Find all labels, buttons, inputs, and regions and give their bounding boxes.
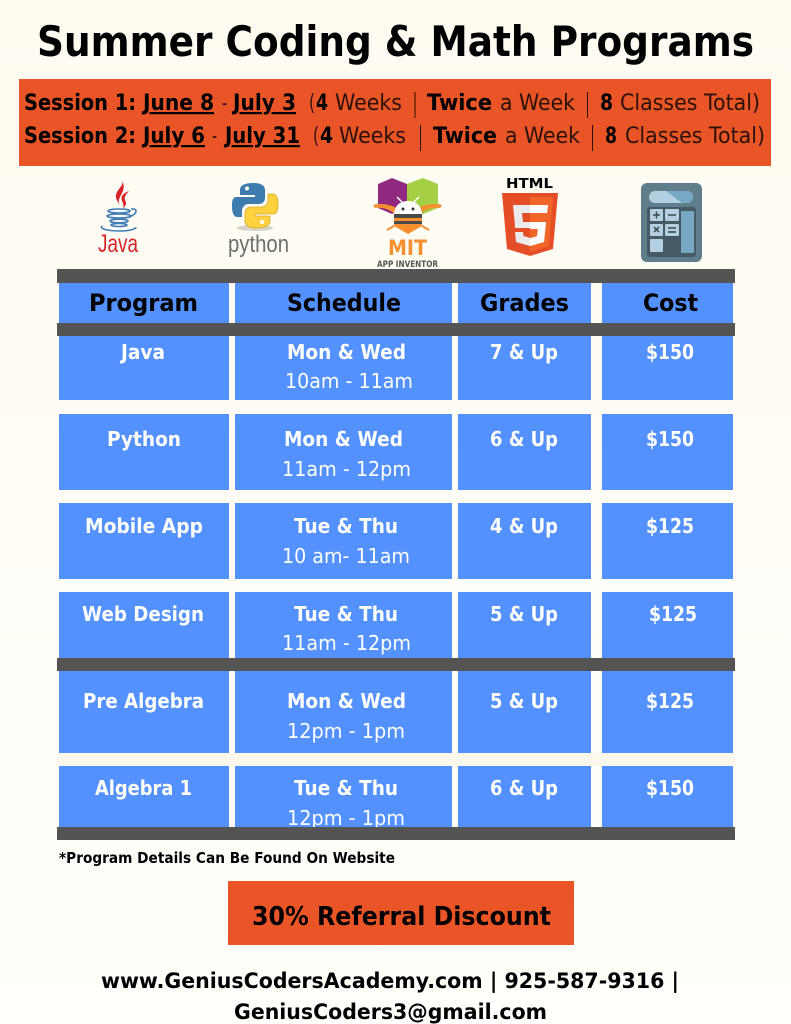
row: python: Python xyxy=(107,427,181,451)
row: algebra 1: $150 xyxy=(646,776,694,800)
icon: html5 xyxy=(502,177,558,256)
band behind final rows xyxy=(57,753,735,766)
row: mobile app: Mobile App xyxy=(85,514,203,538)
row: pre algebra: $125 xyxy=(646,689,694,713)
table header row: Schedule xyxy=(287,289,401,317)
row: pre algebra: Pre Algebra xyxy=(83,689,204,713)
icon: mit app inventor xyxy=(373,178,442,270)
callout: referral discount: 30% Referral Discount xyxy=(252,902,551,932)
session 2 line: Weeks xyxy=(339,124,406,149)
icon: calculator xyxy=(641,183,702,262)
icon: python: python xyxy=(228,231,289,258)
session 2 line: Session 2: xyxy=(24,124,136,149)
contact details xyxy=(101,969,679,1024)
session 2 line: a Week xyxy=(505,124,580,149)
row: pre algebra: Mon & Wed xyxy=(287,689,406,713)
panel: session dates xyxy=(19,79,771,166)
session 2 line: July 31 xyxy=(223,124,300,149)
session 1 line: July 3 xyxy=(231,91,296,116)
icon: java xyxy=(98,180,138,258)
callout: referral discount xyxy=(228,881,574,945)
row: java: Mon & Wed xyxy=(287,340,406,364)
session 1 line: 8 xyxy=(600,91,613,116)
row: web design xyxy=(59,592,733,658)
session 1 line: Classes Total) xyxy=(620,91,760,116)
icon: mit app inventor: APP INVENTOR xyxy=(377,260,438,270)
row: mobile app xyxy=(59,503,733,579)
row: python: 11am - 12pm xyxy=(282,457,411,481)
session 1 line: a Week xyxy=(500,91,575,116)
row: web design: $125 xyxy=(649,602,697,626)
row: mobile app: $125 xyxy=(646,514,694,538)
row: java: Java xyxy=(119,340,165,364)
icon: mit app inventor: MIT xyxy=(388,236,428,260)
row: mobile app: 4 & Up xyxy=(490,514,558,538)
table xyxy=(57,269,735,840)
session 2 line: Classes Total) xyxy=(625,124,765,149)
row: algebra 1 xyxy=(59,766,733,830)
session 1 line: - xyxy=(222,91,227,116)
session 1 line: 4 xyxy=(316,91,328,116)
contact details: GeniusCoders3@gmail.com xyxy=(234,1000,547,1024)
row: java xyxy=(59,336,733,400)
session 2 line xyxy=(24,124,765,151)
icon: java: Java xyxy=(98,230,138,258)
row: java: 10am - 11am xyxy=(285,369,413,393)
session 2 line: Twice xyxy=(433,124,497,149)
table bars xyxy=(57,269,735,840)
table header row: Cost xyxy=(643,289,698,317)
table header row: Grades xyxy=(480,289,569,317)
session 1 line: Session 1: xyxy=(24,91,136,116)
row: mobile app: 10 am- 11am xyxy=(282,544,410,568)
table header row: Program xyxy=(89,289,198,317)
row: python xyxy=(59,414,733,490)
session 2 line: July 6 xyxy=(141,124,205,149)
row: algebra 1: Algebra 1 xyxy=(95,776,192,800)
row: algebra 1: 6 & Up xyxy=(490,776,558,800)
footnote: *Program Details Can Be Found On Website xyxy=(59,849,395,867)
row: python: Mon & Wed xyxy=(284,427,403,451)
session 1 line xyxy=(24,91,760,118)
session 2 line: 8 xyxy=(605,124,617,149)
session 1 line: Weeks xyxy=(335,91,402,116)
row: java: 7 & Up xyxy=(490,340,558,364)
row: python: $150 xyxy=(646,427,694,451)
session 2 line: - xyxy=(212,124,217,149)
row: algebra 1: Tue & Thu xyxy=(294,776,398,800)
row: pre algebra xyxy=(59,671,733,753)
table header row xyxy=(59,283,733,323)
row: mobile app: Tue & Thu xyxy=(294,514,398,538)
row: python: 6 & Up xyxy=(490,427,558,451)
contact details: www.GeniusCodersAcademy.com | 925-587-9316 | xyxy=(101,969,679,994)
row: web design: Tue & Thu xyxy=(294,602,398,626)
session 1 line: Twice xyxy=(427,91,492,116)
session 1 line: ( xyxy=(309,91,315,116)
icon: python xyxy=(228,183,289,258)
session 2 line: ( xyxy=(313,124,319,149)
row: java: $150 xyxy=(646,340,694,364)
row: algebra 1: 12pm - 1pm xyxy=(287,806,405,830)
row: web design: Web Design xyxy=(82,602,204,626)
session 2 line: 4 xyxy=(320,124,333,149)
row: pre algebra: 12pm - 1pm xyxy=(287,719,405,743)
icon: html5: HTML xyxy=(506,177,553,192)
row: pre algebra: 5 & Up xyxy=(490,689,558,713)
session 1 line: June 8 xyxy=(141,91,214,116)
row: web design: 11am - 12pm xyxy=(282,631,411,655)
row: web design: 5 & Up xyxy=(490,602,558,626)
